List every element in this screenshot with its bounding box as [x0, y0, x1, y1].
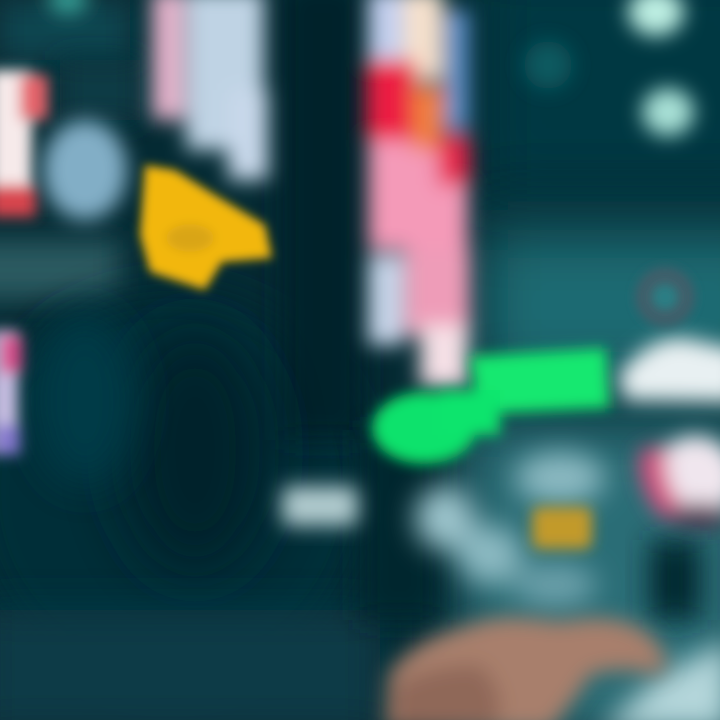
flag stripe	[366, 0, 470, 387]
white text smudge	[282, 486, 358, 526]
left pink panel	[0, 330, 22, 455]
hand	[385, 618, 666, 720]
pink and white vertical stripes	[152, 0, 268, 180]
small yellow badge	[532, 507, 592, 549]
left red and white panel	[0, 70, 48, 217]
gray ring icon	[635, 267, 695, 327]
glowing dots	[48, 0, 694, 136]
yellow badge	[140, 165, 272, 290]
bottom right keyboard light	[600, 640, 720, 720]
light blue blob	[43, 120, 127, 220]
green bar	[372, 348, 610, 464]
pink and white circle	[639, 436, 720, 527]
white rounded label	[618, 338, 720, 402]
gray blue blobs	[415, 452, 605, 607]
